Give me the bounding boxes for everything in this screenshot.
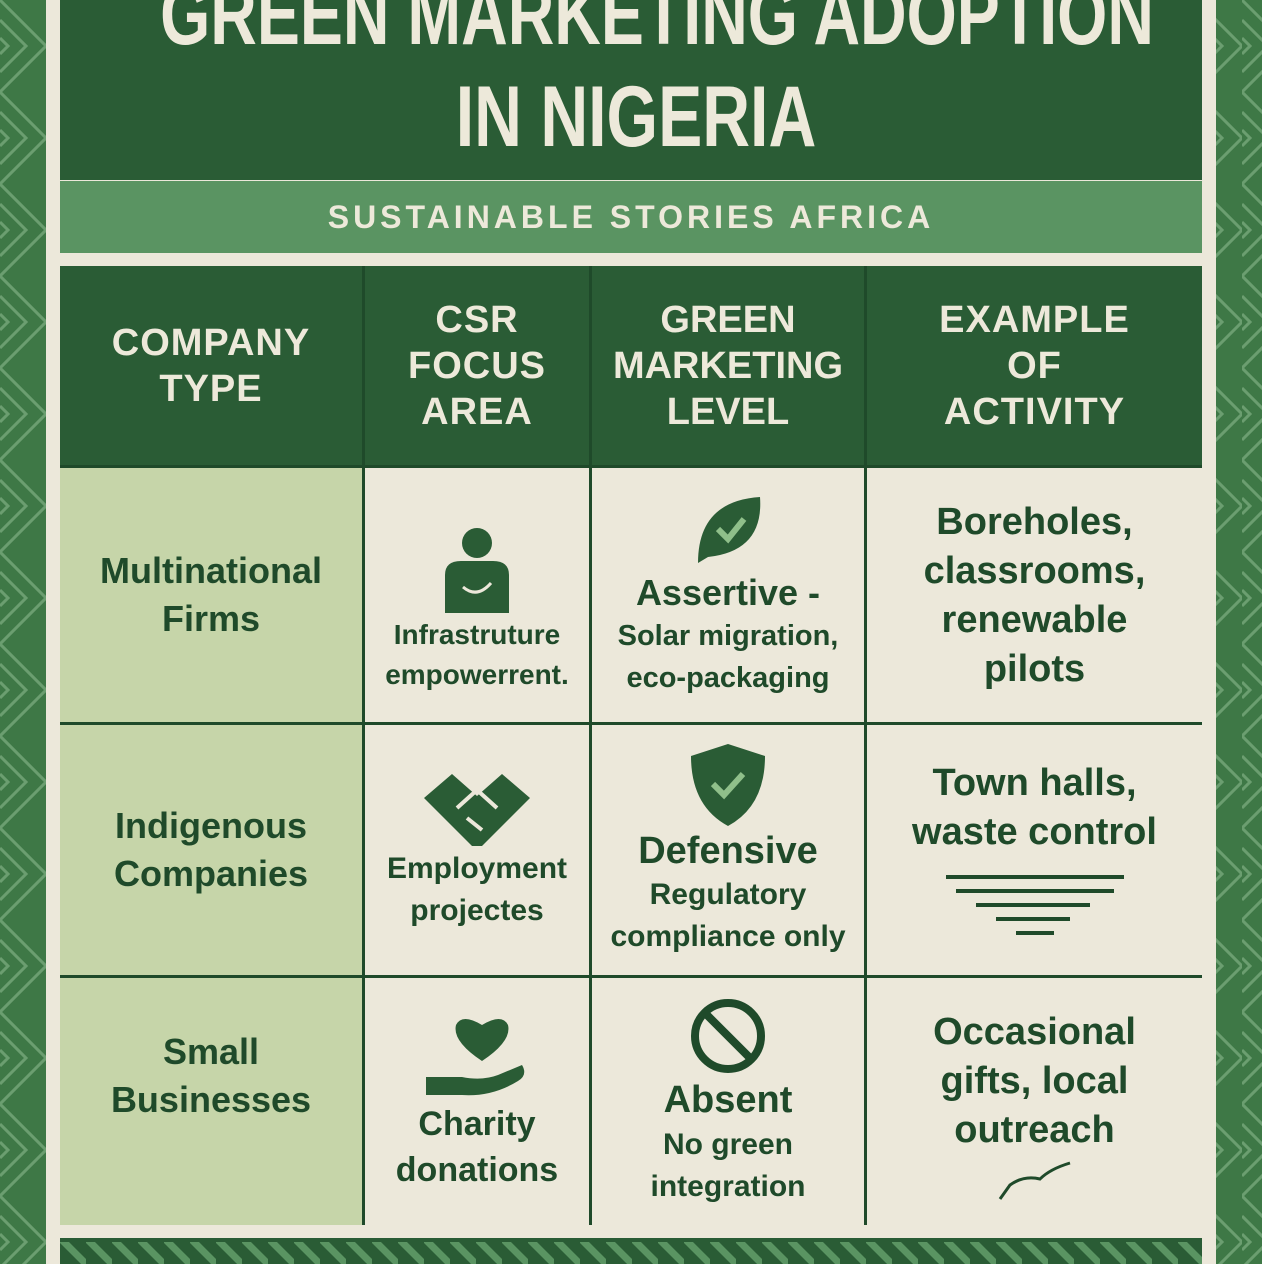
icon: lines	[946, 875, 1124, 935]
table	[60, 266, 1202, 1225]
row 2: Indigenous	[115, 805, 307, 846]
table: FOCUS	[408, 344, 546, 386]
table: ACTIVITY	[944, 390, 1125, 432]
table: renewable	[942, 599, 1127, 641]
table: pilots	[984, 648, 1085, 690]
icon: shield	[691, 744, 765, 826]
row 2: Companies	[114, 853, 308, 894]
row 3	[60, 978, 362, 1225]
table: Town halls,	[932, 762, 1137, 804]
row 1	[60, 468, 362, 722]
row 3: Small	[163, 1031, 259, 1072]
table: Infrastruture	[394, 619, 560, 650]
table: empowerrent.	[385, 659, 569, 690]
table: donations	[396, 1150, 558, 1188]
row 3: Businesses	[111, 1079, 311, 1120]
bottom band	[60, 1238, 1202, 1264]
icon: person	[445, 528, 509, 613]
table: No green	[663, 1128, 793, 1160]
table: Defensive	[638, 830, 818, 872]
table: gifts, local	[941, 1060, 1128, 1102]
table: outreach	[954, 1109, 1115, 1151]
table: COMPANY	[112, 322, 310, 364]
table: CSR	[435, 298, 519, 340]
table: waste control	[912, 811, 1157, 853]
icon: leaf check	[698, 497, 760, 563]
table: integration	[650, 1170, 806, 1202]
subtitle band	[60, 181, 1202, 253]
table: projectes	[410, 894, 544, 927]
row 2	[60, 725, 362, 975]
table: classrooms,	[924, 550, 1145, 592]
table: eco-packaging	[626, 662, 830, 694]
table: EXAMPLE	[939, 298, 1130, 340]
table: Charity	[418, 1104, 536, 1142]
table: compliance only	[610, 920, 846, 953]
table: Boreholes,	[936, 501, 1133, 543]
row 1: Multinational	[100, 550, 322, 591]
header row	[60, 266, 362, 465]
table: AREA	[421, 390, 533, 432]
table: Absent	[664, 1078, 792, 1120]
table: OF	[1007, 344, 1062, 386]
table: Employment	[387, 852, 567, 885]
title band	[60, 0, 1202, 180]
icon: map line	[998, 1162, 1070, 1200]
icon: handshake	[424, 774, 530, 846]
table: TYPE	[159, 368, 263, 410]
icon: prohibited	[691, 999, 765, 1073]
row 1: Firms	[162, 598, 260, 639]
table: Assertive -	[636, 572, 820, 613]
icon: heart hand	[426, 1019, 524, 1096]
table: Solar migration,	[618, 620, 838, 652]
title: IN NIGERIA	[456, 69, 816, 165]
table: LEVEL	[667, 390, 789, 432]
table: Regulatory	[650, 878, 806, 911]
table: Occasional	[933, 1011, 1136, 1053]
subtitle band: SUSTAINABLE STORIES AFRICA	[328, 199, 934, 235]
title	[160, 0, 1154, 165]
table: MARKETING	[613, 344, 843, 386]
table: GREEN	[660, 298, 796, 340]
